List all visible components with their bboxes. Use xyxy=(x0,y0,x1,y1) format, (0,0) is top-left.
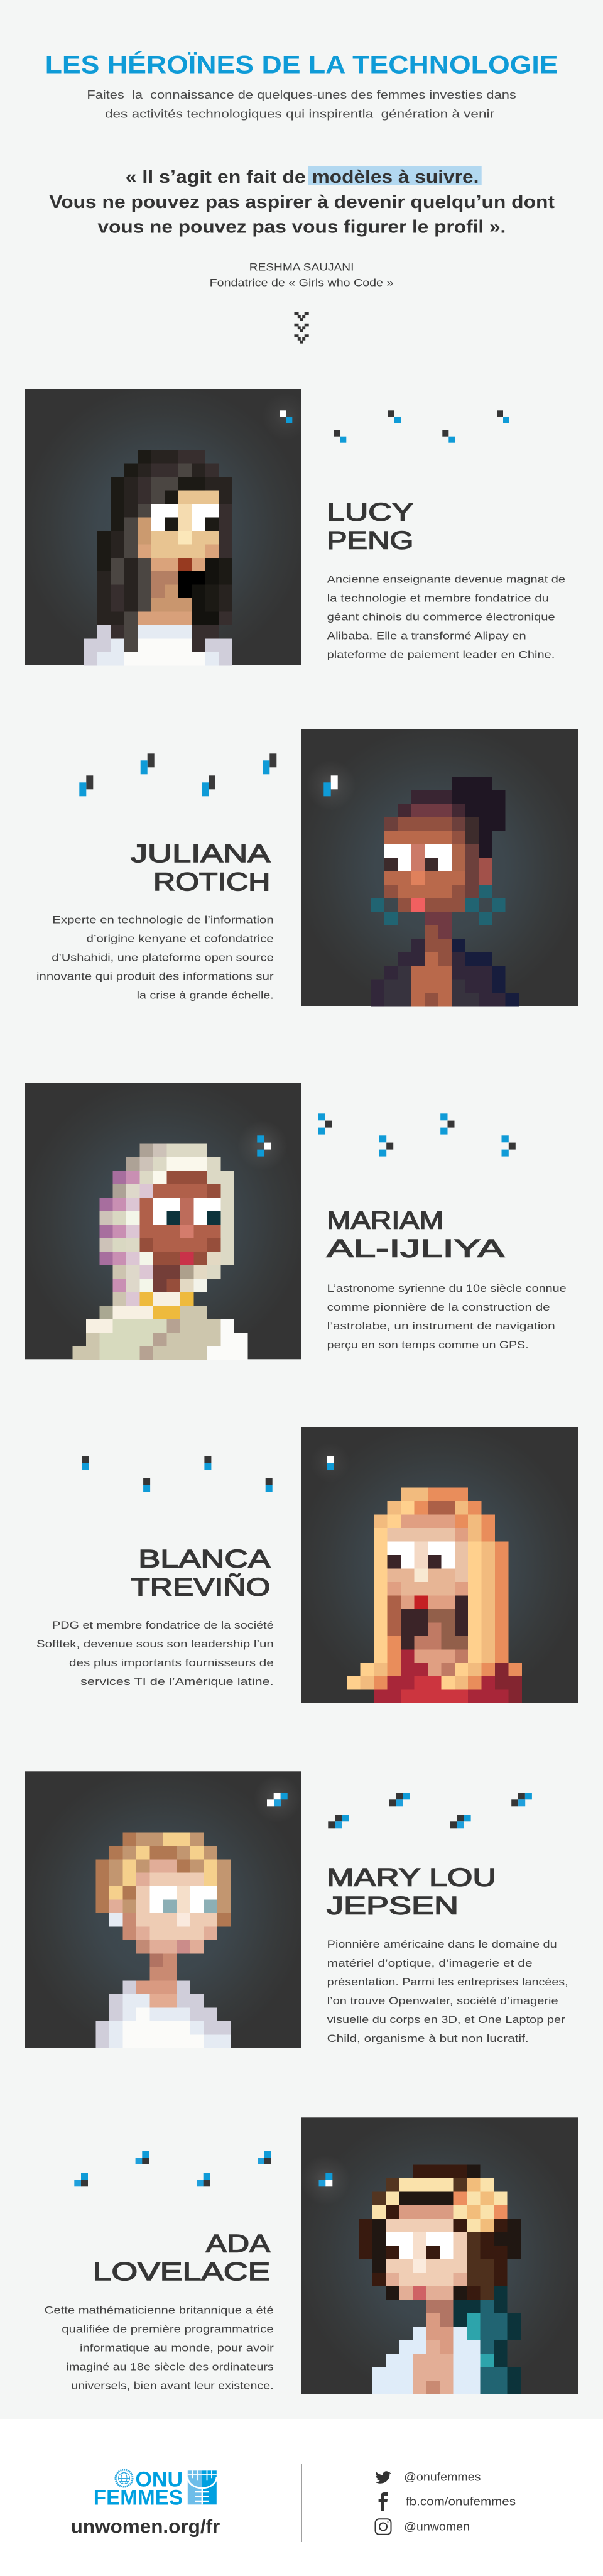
quote xyxy=(49,166,555,237)
social links: @unwomen xyxy=(404,2520,470,2533)
description: l’astrolabe, un instrument de navigation xyxy=(327,1320,555,1332)
footer xyxy=(0,2419,603,2576)
description: universels, bien avant leur existence. xyxy=(71,2380,274,2392)
name: BLANCA xyxy=(138,1545,271,1573)
panel: Mariam Al-Ijliya xyxy=(25,1083,567,1359)
title: LES HÉROÏNES DE LA TECHNOLOGIE xyxy=(45,52,558,79)
description: des plus importants fournisseurs de xyxy=(69,1657,274,1669)
description: perçu en son temps comme un GPS. xyxy=(327,1339,529,1351)
description: matériel d’optique, d’imagerie et de xyxy=(327,1957,533,1969)
subtitle: Faites la connaissance de quelques-unes des femmes investies dans xyxy=(87,88,516,101)
name xyxy=(131,840,271,896)
name xyxy=(327,1206,505,1262)
description: Softtek, devenue sous son leadership l’un xyxy=(36,1638,274,1650)
name xyxy=(93,2230,271,2286)
pixel marks xyxy=(82,1456,273,1492)
description: imaginé au 18e siècle des ordinateurs xyxy=(67,2361,274,2373)
logo: ONU Femmes xyxy=(94,2467,217,2509)
icon: facebook xyxy=(379,2492,388,2511)
description: innovante qui produit des informations sur xyxy=(36,970,274,982)
name: ROTICH xyxy=(153,868,270,896)
name xyxy=(327,498,413,554)
portrait: Lucy Peng xyxy=(25,389,310,665)
name: MARIAM xyxy=(327,1206,443,1234)
scroll arrows xyxy=(294,312,309,344)
description: Ancienne enseignante devenue magnat de xyxy=(327,573,565,585)
name: PENG xyxy=(327,527,413,554)
panel: Blanca Treviño xyxy=(36,1427,578,1703)
quote: « Il s’agit en fait de xyxy=(126,167,306,187)
social links xyxy=(375,2470,516,2535)
pixel marks xyxy=(328,1793,532,1828)
icon: pixel glint xyxy=(280,410,292,423)
description: comme pionnière de la construction de xyxy=(327,1301,550,1313)
quote attribution: Fondatrice de « Girls who Code » xyxy=(210,276,393,288)
description: Experte en technologie de l’information xyxy=(52,914,274,925)
description: d’origine kenyane et cofondatrice xyxy=(87,932,274,944)
website: unwomen.org/fr xyxy=(71,2516,220,2538)
icon: twitter xyxy=(375,2471,391,2484)
quote: modèles à suivre. xyxy=(312,167,479,187)
description xyxy=(45,2305,274,2392)
description: PDG et membre fondatrice de la société xyxy=(52,1619,274,1631)
description xyxy=(327,1282,567,1351)
name: MARY LOU xyxy=(327,1864,496,1891)
subtitle: des activités technologiques qui inspirentla génération à venir xyxy=(105,107,494,121)
quote attribution xyxy=(210,261,393,288)
portrait: Mary Lou Jepsen xyxy=(25,1771,302,2048)
name: JULIANA xyxy=(131,840,271,868)
name: ADA xyxy=(206,2230,271,2257)
portrait: Blanca Treviño xyxy=(302,1427,578,1703)
portrait: Juliana Rotich xyxy=(302,729,578,1006)
description: services TI de l’Amérique latine. xyxy=(80,1676,274,1688)
icon: pixel glint xyxy=(319,2173,332,2186)
description xyxy=(327,1938,568,2044)
description xyxy=(36,914,274,1001)
name: LOVELACE xyxy=(93,2258,270,2286)
header xyxy=(45,52,558,121)
description: d’Ushahidi, une plateforme open source xyxy=(52,951,274,963)
description: visuelle du corps en 3D, et One Laptop per xyxy=(327,2014,565,2026)
logo: ONU Femmes: ONU xyxy=(136,2467,183,2491)
description: Cette mathématicienne britannique a été xyxy=(45,2305,274,2317)
icon: pixel glint xyxy=(267,1793,288,1806)
name: TREVIÑO xyxy=(131,1573,270,1601)
panel: Juliana Rotich xyxy=(36,729,578,1006)
description: qualifiée de première programmatrice xyxy=(62,2323,274,2335)
name: JEPSEN xyxy=(327,1892,459,1919)
portrait: Ada Lovelace xyxy=(300,2117,578,2394)
quote attribution: RESHMA SAUJANI xyxy=(249,261,354,273)
icon: UN emblem xyxy=(116,2470,133,2487)
description: la crise à grande échelle. xyxy=(137,989,274,1001)
description: Alibaba. Elle a transformé Alipay en xyxy=(327,630,526,641)
icon: UN Women symbol xyxy=(188,2470,217,2504)
name xyxy=(131,1545,271,1601)
description: présentation. Parmi les entreprises lancées, xyxy=(327,1976,568,1988)
description xyxy=(36,1619,274,1688)
icon: pixel glint xyxy=(257,1135,271,1157)
name: LUCY xyxy=(327,498,413,526)
icon: pixel glint xyxy=(323,775,338,796)
social links: fb.com/onufemmes xyxy=(406,2496,516,2508)
panel: Mary Lou Jepsen xyxy=(25,1771,568,2048)
pixel marks xyxy=(74,2151,271,2186)
quote: vous ne pouvez pas vous figurer le profil ». xyxy=(98,217,506,237)
description: L’astronome syrienne du 10e siècle connue xyxy=(327,1282,567,1294)
icon: instagram xyxy=(376,2519,391,2535)
description: plateforme de paiement leader en Chine. xyxy=(327,648,555,660)
name: AL-IJLIYA xyxy=(327,1235,505,1262)
description: l’on trouve Openwater, société d’imagerie xyxy=(327,1995,558,2007)
panel: Ada Lovelace xyxy=(45,2117,578,2394)
social links: @onufemmes xyxy=(404,2470,481,2483)
description: la technologie et membre fondatrice du xyxy=(327,592,549,604)
quote highlight xyxy=(308,166,482,185)
name xyxy=(327,1864,496,1919)
logo: ONU Femmes: FEMMES xyxy=(94,2486,183,2509)
subtitle xyxy=(87,88,516,121)
icon: pixel glint xyxy=(327,1456,334,1470)
panel: Lucy Peng xyxy=(25,389,565,665)
description: géant chinois du commerce électronique xyxy=(327,611,555,623)
pixel marks xyxy=(334,410,509,443)
pixel marks xyxy=(79,753,276,796)
description xyxy=(327,573,565,660)
description: Child, organisme à but non lucratif. xyxy=(327,2033,529,2044)
pixel marks xyxy=(318,1113,516,1157)
quote: Vous ne pouvez pas aspirer à devenir quelqu’un dont xyxy=(49,192,555,212)
portrait: Mariam Al-Ijliya xyxy=(25,1083,302,1359)
description: Pionnière américaine dans le domaine du xyxy=(327,1938,557,1950)
description: informatique au monde, pour avoir xyxy=(80,2342,274,2354)
